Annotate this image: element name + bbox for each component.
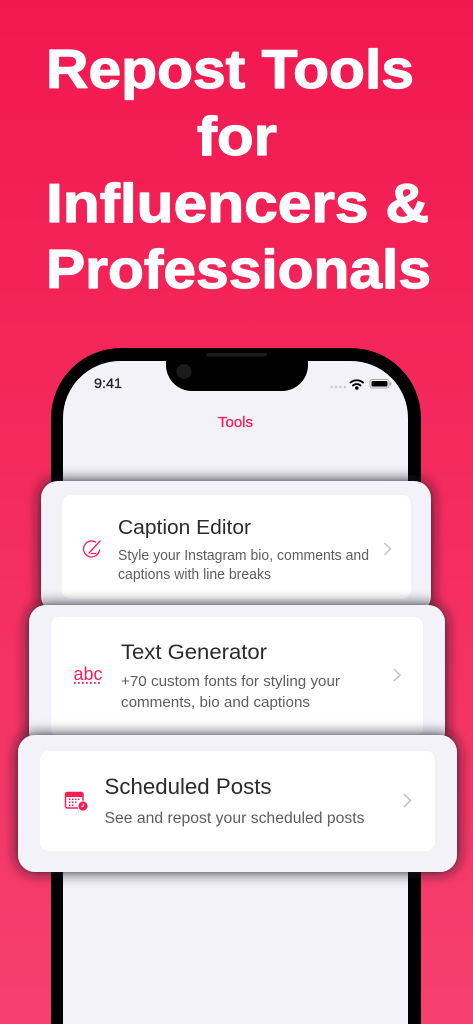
signal dots	[330, 386, 346, 388]
heading: Text Generator	[121, 641, 267, 664]
heading: Caption Editor	[118, 516, 251, 539]
card background	[18, 735, 457, 872]
panel: text generator	[29, 605, 445, 749]
description: captions with line breaks	[118, 567, 271, 583]
title: Repost Tools	[46, 38, 414, 100]
icon: abc: abc	[74, 663, 102, 684]
phone body	[51, 348, 421, 1024]
chevron	[384, 543, 390, 555]
description: Style your Instagram bio, comments and	[118, 548, 369, 564]
icon: caption edit	[84, 541, 100, 557]
speaker	[206, 353, 267, 356]
description: +70 custom fonts for styling your	[121, 673, 340, 690]
title: for	[197, 105, 277, 167]
description: comments, bio and captions	[121, 694, 310, 711]
panel: caption editor	[41, 481, 431, 613]
front camera	[176, 364, 192, 379]
chevron	[404, 794, 410, 807]
card inner	[62, 495, 411, 599]
card inner	[51, 617, 423, 737]
icon: wifi	[350, 380, 363, 389]
title	[46, 38, 431, 300]
chevron	[394, 669, 400, 681]
description: See and repost your scheduled posts	[104, 810, 365, 827]
title: Professionals	[46, 238, 431, 300]
icon: calendar clock	[65, 792, 88, 811]
faint card behind	[81, 473, 389, 503]
description	[118, 548, 369, 583]
icon: battery	[370, 380, 391, 388]
nav title: Tools	[218, 414, 253, 431]
card background	[41, 481, 431, 613]
title: Influencers &	[46, 172, 429, 234]
phone mockup	[51, 348, 421, 1024]
status bar time: 9:41	[94, 375, 122, 391]
description	[121, 673, 340, 711]
phone screen	[63, 361, 408, 1024]
panel: scheduled posts	[18, 735, 457, 872]
card background	[29, 605, 445, 749]
heading: Scheduled Posts	[104, 774, 272, 799]
card inner	[40, 751, 435, 851]
